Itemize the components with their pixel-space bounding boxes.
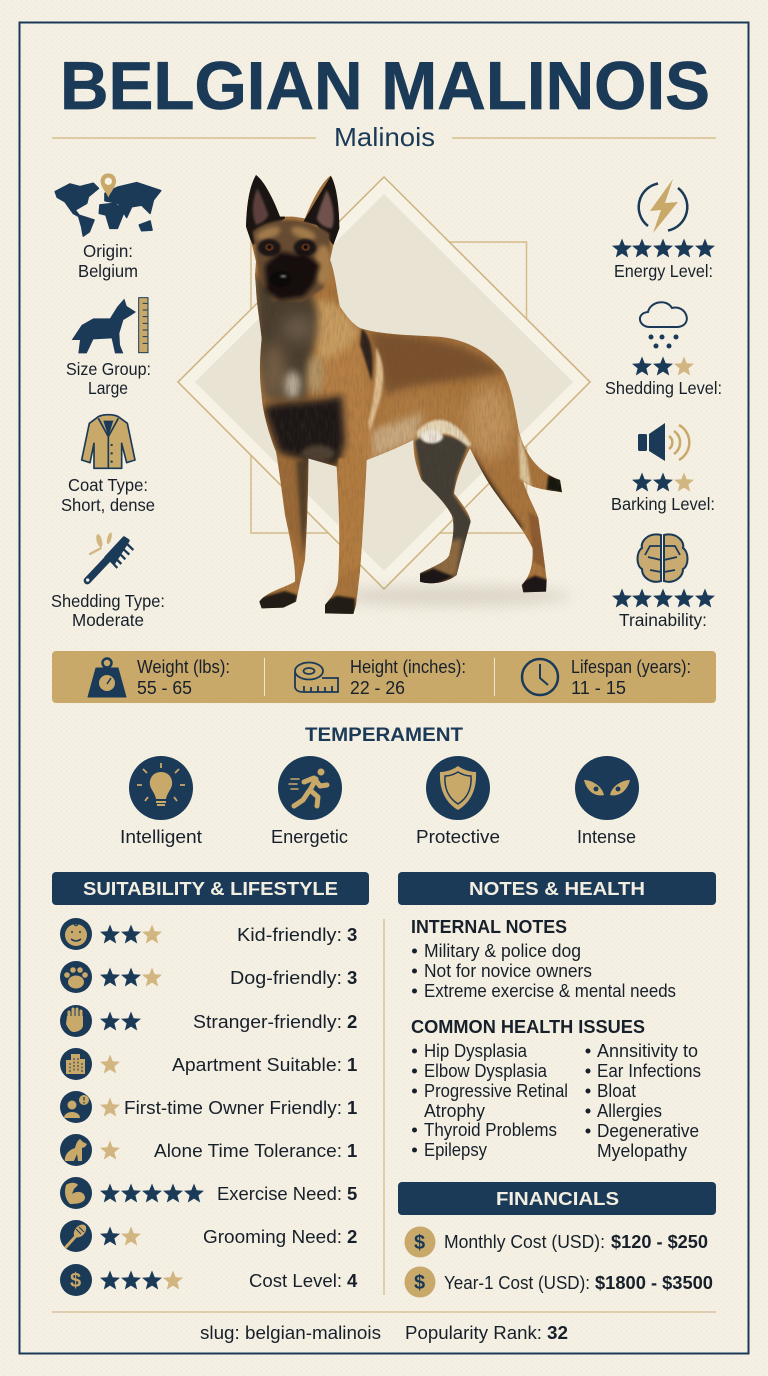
monthly cost — [404, 1226, 708, 1258]
left facts column — [51, 173, 165, 630]
row: kid-friendly — [60, 918, 357, 950]
icon: grooming brush — [86, 532, 133, 582]
row: first-time owner friendly: 1 — [347, 1097, 357, 1118]
row: alone time tolerance: 1 — [347, 1140, 357, 1161]
icon: rain cloud — [640, 302, 687, 348]
stat: lifespan: 11 - 15 — [571, 677, 626, 698]
row: stranger-friendly — [60, 1005, 357, 1037]
header: suitability — [52, 872, 369, 905]
row: kid-friendly: 3 — [347, 924, 357, 945]
list: health issues left column: Elbow Dysplasia — [424, 1060, 548, 1081]
stat: weight — [88, 656, 230, 698]
stars: 2 navy 1 gold — [632, 472, 694, 492]
row: grooming need: Grooming Need: — [203, 1226, 342, 1247]
rating: barking level: Barking Level: — [611, 494, 715, 514]
row: cost level: 4 — [347, 1270, 358, 1291]
footer: slug: belgian-malinois — [200, 1322, 381, 1343]
icon: brain — [638, 534, 688, 582]
fact: origin: Belgium — [78, 261, 138, 281]
stat: height: 22 - 26 — [350, 677, 405, 698]
icon: measuring tape — [295, 662, 338, 692]
row: exercise need — [60, 1177, 357, 1209]
fact: size group: Large — [88, 378, 128, 398]
row: exercise need: 5 — [347, 1183, 357, 1204]
stat: lifespan — [522, 656, 691, 698]
heading: temperament: TEMPERAMENT — [305, 725, 463, 746]
internal notes: INTERNAL NOTES — [411, 917, 567, 937]
fact: origin — [55, 173, 161, 281]
title: BELGIAN MALINOIS — [60, 48, 710, 124]
temperament section — [120, 725, 639, 847]
fact: coat type — [61, 415, 155, 515]
stat: weight: 55 - 65 — [137, 677, 192, 698]
list: health issues left column: Epilepsy — [424, 1139, 488, 1160]
rating: energy level: Energy Level: — [614, 261, 713, 281]
icon: dog silhouette with ruler — [72, 298, 148, 353]
row: cost level — [60, 1264, 358, 1296]
trait: energetic: Energetic — [271, 826, 348, 847]
list: health issues right column: Allergies — [597, 1100, 662, 1121]
footer — [200, 1322, 568, 1343]
icon: intense eyes — [584, 780, 630, 795]
dog photo illustration — [237, 165, 570, 625]
internal notes: Extreme exercise & mental needs — [424, 980, 676, 1001]
row: alone time tolerance — [60, 1134, 357, 1166]
monthly cost: Monthly Cost (USD): — [444, 1231, 605, 1252]
hero: dog on diamond backdrop — [178, 165, 590, 625]
stat: height: Height (inches): — [350, 656, 466, 677]
trait: intense: Intense — [577, 826, 636, 847]
row: kid-friendly: Kid-friendly: — [237, 924, 342, 945]
row: exercise need: Exercise Need: — [217, 1183, 342, 1204]
stars: 2 navy 1 gold — [632, 356, 694, 376]
header: suitability: SUITABILITY & LIFESTYLE — [83, 878, 338, 899]
row: alone time tolerance: Alone Time Tolerance: — [154, 1140, 342, 1161]
trait: intelligent: Intelligent — [120, 826, 202, 847]
rating: shedding level — [605, 302, 722, 398]
stars: 5 navy — [612, 238, 715, 258]
year-1 cost: $1800 - $3500 — [595, 1272, 713, 1293]
row: cost level: $ — [70, 1270, 81, 1292]
header: financials: FINANCIALS — [496, 1188, 619, 1209]
list: health issues right column: Myelopathy — [597, 1140, 688, 1161]
rating: shedding level: Shedding Level: — [605, 378, 722, 398]
row: stranger-friendly: Stranger-friendly: — [193, 1011, 342, 1032]
list: health issues left column: Progressive Retinal — [424, 1080, 568, 1101]
trait: protective — [416, 756, 500, 847]
fact: size group — [66, 298, 151, 398]
fact: shedding type: Shedding Type: — [51, 591, 165, 611]
list: health issues left column: Atrophy — [424, 1100, 486, 1121]
list: health issues right column: Annsitivity to — [597, 1040, 698, 1061]
fact: origin: Origin: — [83, 241, 133, 261]
header: financials — [398, 1182, 716, 1215]
row: first-time owner friendly: First-time Owner Friendly: — [124, 1097, 342, 1118]
row: grooming need: 2 — [347, 1226, 357, 1247]
trait: intense — [575, 756, 639, 847]
icon: world map with pin — [55, 173, 161, 236]
footer: Popularity Rank: — [405, 1322, 542, 1343]
right ratings column — [605, 179, 722, 630]
list: health issues left column: Thyroid Problems — [424, 1119, 557, 1140]
icon: shield — [440, 766, 476, 810]
row: dog-friendly: Dog-friendly: — [230, 967, 342, 988]
list: health issues right column: Degenerative — [597, 1120, 699, 1141]
stat: lifespan: Lifespan (years): — [571, 656, 691, 677]
rating: trainability: Trainability: — [619, 610, 707, 630]
fact: shedding type: Moderate — [72, 610, 144, 630]
common health issues: COMMON HEALTH ISSUES — [411, 1017, 645, 1037]
row: cost level: Cost Level: — [249, 1270, 342, 1291]
list: health issues left column: Hip Dysplasia — [424, 1040, 528, 1061]
stars: 5 navy — [612, 588, 715, 608]
row: dog-friendly: 3 — [347, 967, 357, 988]
icon: light bulb — [137, 763, 185, 805]
row: apartment suitable: 1 — [347, 1054, 357, 1075]
header: notes and health — [398, 872, 716, 905]
year-1 cost: Year-1 Cost (USD): — [444, 1272, 590, 1293]
rating: barking level — [611, 423, 715, 514]
row: first-time owner friendly — [60, 1091, 357, 1123]
header: notes and health: NOTES & HEALTH — [469, 878, 645, 899]
internal notes: Military & police dog — [424, 940, 581, 961]
fact: shedding type — [51, 532, 165, 630]
icon: clock — [522, 659, 558, 695]
internal notes — [411, 917, 676, 1001]
common health issues — [411, 1017, 701, 1161]
icon: lightning bolt in ring — [639, 179, 687, 233]
icon: speaker with sound waves — [638, 423, 689, 461]
list: health issues right column: Ear Infections — [597, 1060, 701, 1081]
list: health issues left column — [412, 1040, 568, 1160]
monthly cost: $120 - $250 — [611, 1231, 708, 1252]
row: apartment suitable: Apartment Suitable: — [172, 1054, 342, 1075]
fact: coat type: Short, dense — [61, 495, 155, 515]
row: apartment suitable — [60, 1048, 357, 1080]
stat: weight: Weight (lbs): — [137, 656, 230, 677]
fact: size group: Size Group: — [66, 359, 151, 379]
trait: intelligent — [120, 756, 202, 847]
icon: jacket — [82, 415, 135, 468]
stat: height — [295, 656, 466, 698]
fact: coat type: Coat Type: — [68, 475, 148, 495]
stats band — [52, 651, 716, 703]
panel: financials — [398, 1182, 716, 1298]
rating: trainability — [612, 534, 715, 630]
list: health issues right column — [586, 1040, 701, 1161]
trait: energetic — [271, 756, 348, 847]
monthly cost: $ — [414, 1232, 425, 1254]
trait: protective: Protective — [416, 826, 500, 847]
icon: runner — [289, 768, 327, 806]
year-1 cost: $ — [414, 1272, 425, 1294]
row: grooming need — [60, 1220, 357, 1252]
rating: energy level — [612, 179, 715, 281]
panel: suitability and lifestyle — [52, 872, 369, 1296]
footer: 32 — [547, 1322, 568, 1343]
row: stranger-friendly: 2 — [347, 1011, 357, 1032]
internal notes: Not for novice owners — [424, 960, 592, 981]
year-1 cost — [404, 1266, 713, 1298]
list: health issues right column: Bloat — [597, 1080, 636, 1101]
icon: kettle weight — [88, 658, 126, 697]
subtitle: Malinois — [334, 122, 435, 152]
row: dog-friendly — [60, 961, 357, 993]
panel: notes and health — [398, 872, 716, 1161]
